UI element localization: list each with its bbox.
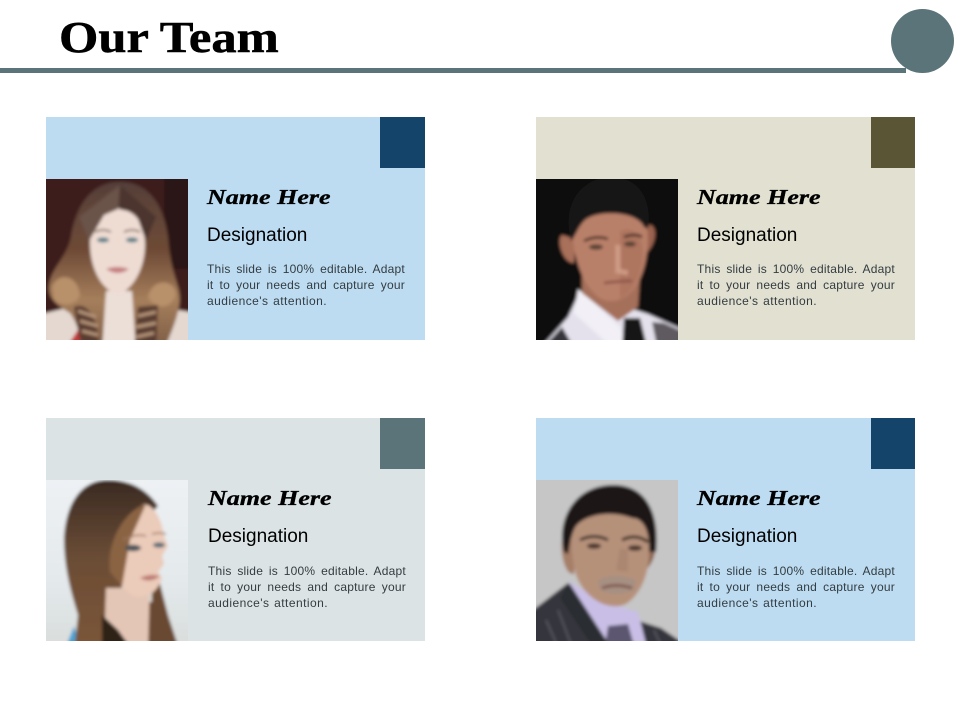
description xyxy=(697,262,895,308)
accent square xyxy=(871,117,915,168)
header circle xyxy=(891,9,954,73)
photo: woman with curly hair xyxy=(46,179,188,340)
designation: Designation xyxy=(697,225,797,246)
panel: team member 4 xyxy=(536,418,915,641)
title: Our Team xyxy=(59,13,279,62)
designation: Designation xyxy=(208,526,308,547)
photo: man in pinstripe suit xyxy=(536,480,678,641)
panel: team member 3 xyxy=(46,418,425,641)
description xyxy=(208,564,406,610)
designation: Designation xyxy=(207,225,307,246)
name: Name Here xyxy=(697,486,821,510)
description: This slide is 100% editable. Adapt xyxy=(697,564,895,578)
accent square xyxy=(380,117,425,168)
name: Name Here xyxy=(208,486,332,510)
member text xyxy=(206,185,405,308)
description: This slide is 100% editable. Adapt xyxy=(208,564,406,578)
description: it to your needs and capture your xyxy=(697,278,895,292)
description: This slide is 100% editable. Adapt xyxy=(697,262,895,276)
member text xyxy=(208,486,406,610)
panel: team member 1 xyxy=(46,117,425,340)
description xyxy=(697,564,895,610)
name: Name Here xyxy=(207,185,331,209)
member text xyxy=(696,486,895,610)
description: it to your needs and capture your xyxy=(697,580,895,594)
description: it to your needs and capture your xyxy=(208,580,406,594)
accent square xyxy=(380,418,425,469)
description: This slide is 100% editable. Adapt xyxy=(207,262,405,276)
photo: woman in profile with long hair xyxy=(46,480,188,641)
description: it to your needs and capture your xyxy=(207,278,405,292)
panel: team member 2 xyxy=(536,117,915,340)
member text xyxy=(696,185,895,308)
description: audience's attention. xyxy=(208,596,328,610)
photo: man in white shirt and tie xyxy=(536,179,678,340)
description xyxy=(207,262,405,308)
designation: Designation xyxy=(697,526,797,547)
description: audience's attention. xyxy=(697,294,817,308)
name: Name Here xyxy=(697,185,821,209)
accent square xyxy=(871,418,915,469)
description: audience's attention. xyxy=(697,596,817,610)
description: audience's attention. xyxy=(207,294,327,308)
header rule xyxy=(0,68,906,73)
